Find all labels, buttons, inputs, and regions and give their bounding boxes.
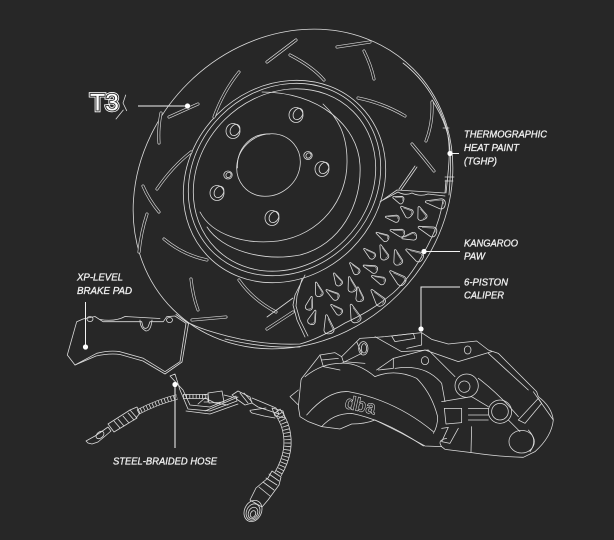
label: 6-piston caliper: CALIPER (464, 290, 504, 302)
label: steel-braided hose: STEEL-BRAIDED HOSE (113, 456, 217, 468)
label: thermographic heat paint: HEAT PAINT (464, 143, 520, 154)
label: kangaroo paw: KANGAROO (464, 238, 518, 250)
label: 6-piston caliper: 6-PISTON (464, 278, 509, 288)
label: kangaroo paw: PAW (464, 252, 486, 262)
rotor slots (139, 40, 434, 329)
label: kangaroo paw (464, 238, 518, 262)
logo: T3: T3 (90, 90, 119, 116)
logo: dba on caliper: dba (343, 392, 378, 419)
logo: T3: T3 (90, 90, 119, 116)
leader: brake pad (83, 302, 88, 350)
centre bore (224, 121, 313, 209)
leader: thermographic heat paint (447, 151, 459, 156)
kangaroo paw ventilation holes (305, 193, 446, 335)
label: XP-level brake pad: BRAKE PAD (77, 286, 132, 297)
hub rings (142, 39, 427, 324)
label: thermographic heat paint (464, 130, 548, 168)
rotor outer edge (67, 0, 519, 415)
label: XP-level brake pad: XP-LEVEL (76, 272, 123, 284)
logo: T3 (90, 90, 127, 119)
rotor rim inner lines (187, 63, 454, 347)
label: 6-piston caliper (464, 278, 509, 302)
brake pad (67, 314, 188, 374)
label: XP-level brake pad (76, 272, 132, 297)
caliper (290, 333, 553, 457)
bolt holes (210, 107, 331, 226)
leader: T3 (138, 103, 190, 109)
leader: steel-braided hose (172, 382, 178, 448)
steel-braided hose (86, 374, 288, 525)
leader: kangaroo paw (421, 249, 460, 254)
leader: 6-piston caliper (418, 287, 460, 332)
label: thermographic heat paint: THERMOGRAPHIC (464, 130, 548, 140)
kangaroo paw cut-away edges (267, 180, 446, 337)
brake rotor (67, 0, 519, 415)
label: thermographic heat paint: (TGHP) (464, 156, 497, 168)
